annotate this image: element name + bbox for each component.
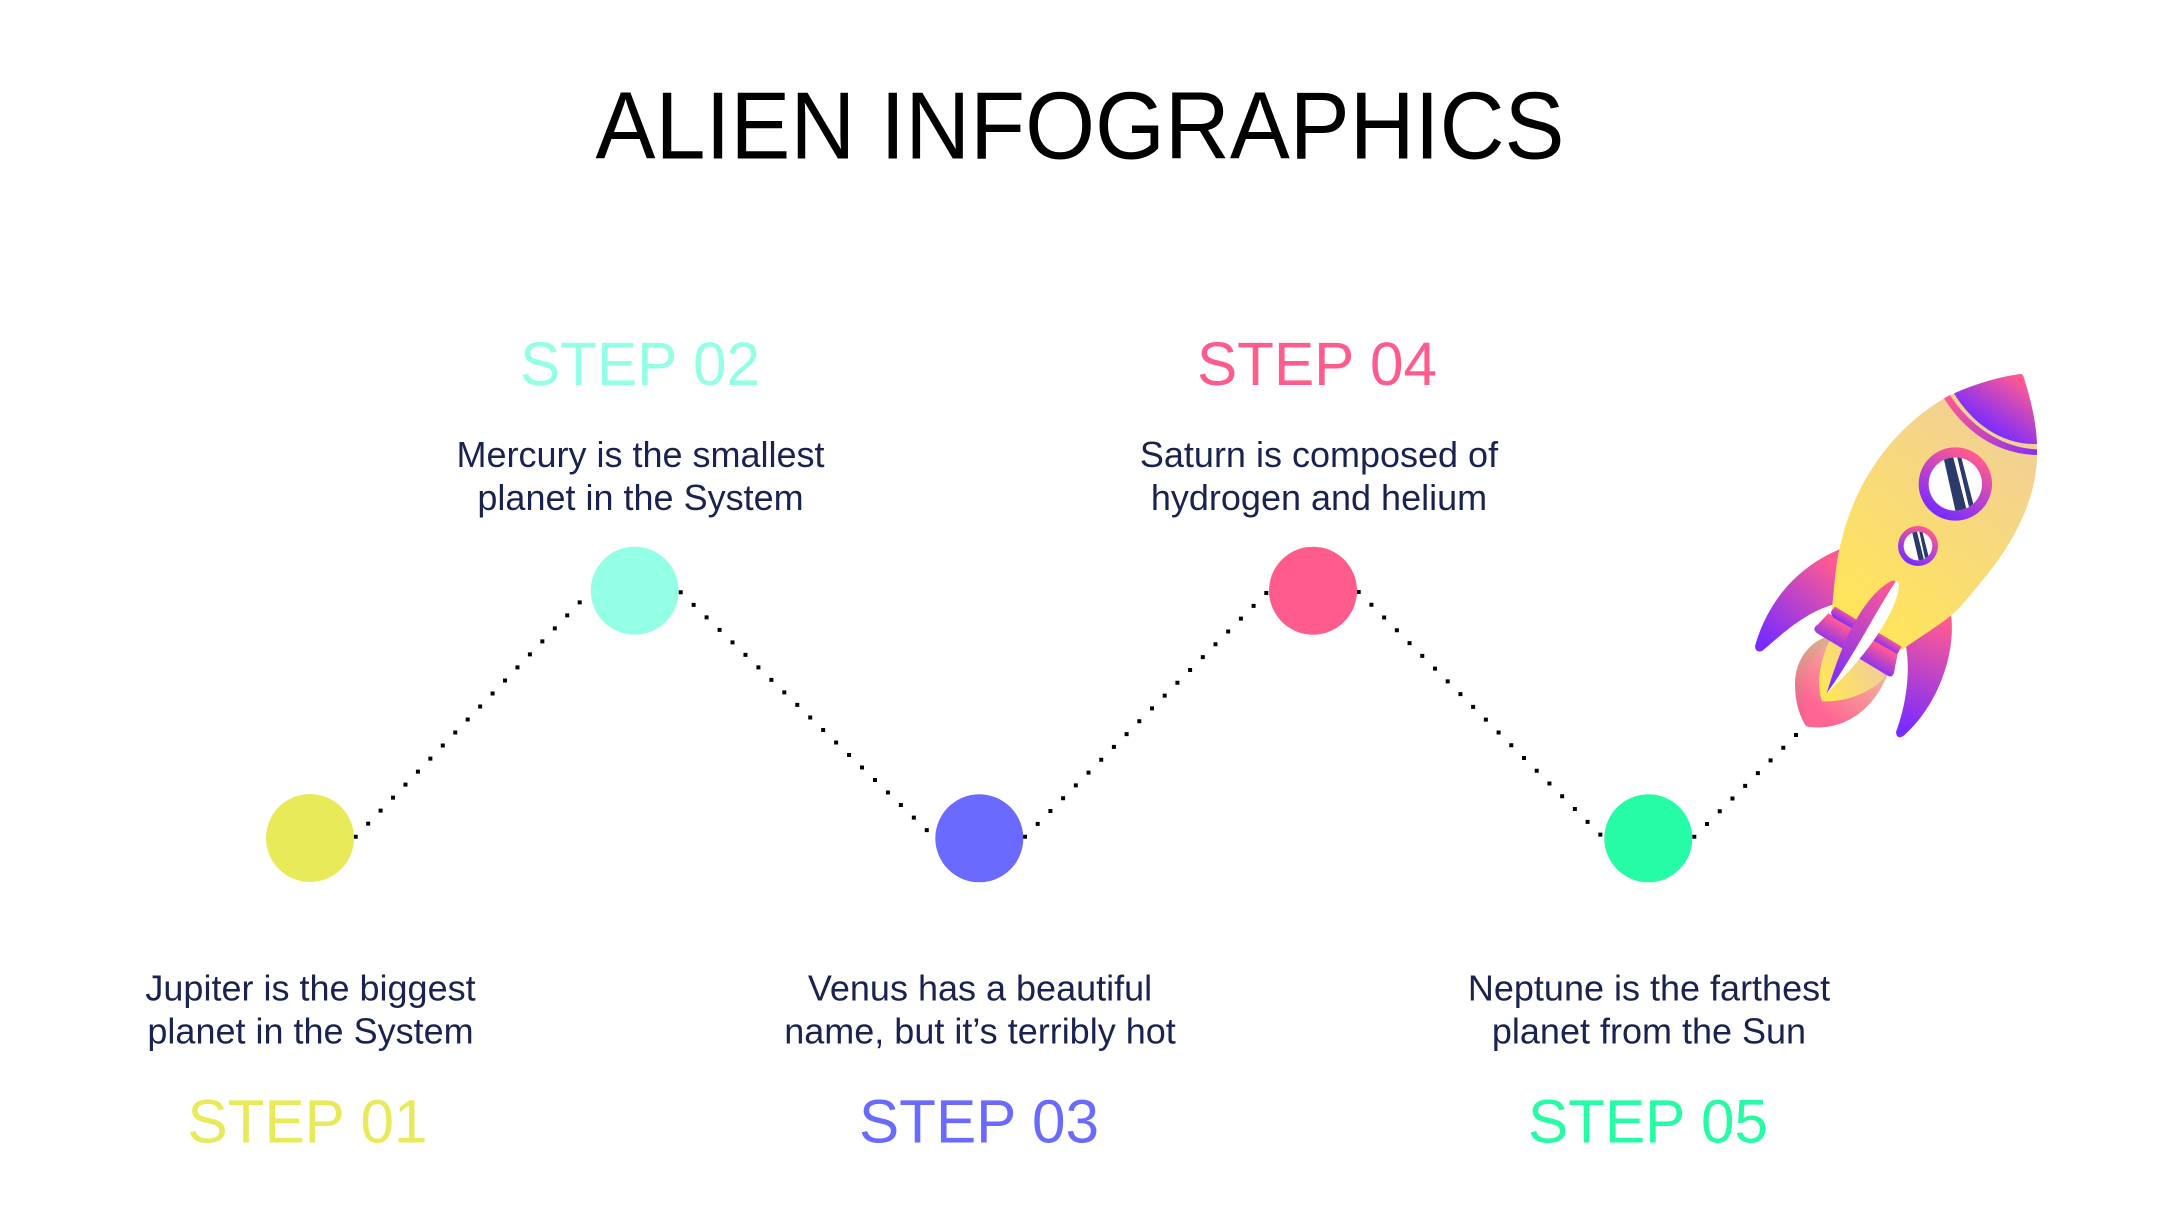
rocket nozzle [1814, 613, 1898, 677]
step 04 heading: STEP 04 [1197, 330, 1437, 399]
step 04 marker circle [1269, 547, 1357, 635]
rocket nose band [1944, 395, 2037, 455]
step 02 heading: STEP 02 [520, 330, 760, 399]
step 04 [1140, 330, 1499, 635]
step 03 description: name, but it’s terribly hot [784, 1010, 1176, 1051]
rocket left fin [1755, 547, 1847, 652]
step 01 marker circle [266, 794, 354, 882]
rocket small window [1898, 526, 1938, 566]
rocket right fin [1896, 603, 1952, 737]
rocket flame [1795, 635, 1887, 727]
step 03 description: Venus has a beautiful [808, 968, 1152, 1008]
step 05 heading: STEP 05 [1528, 1088, 1768, 1157]
title: ALIEN INFOGRAPHICS [596, 73, 1564, 179]
dotted connector: step 04 to step 05 [1359, 592, 1600, 835]
step 03 [784, 794, 1176, 1157]
step 03 heading: STEP 03 [859, 1088, 1099, 1157]
step 05 [1468, 794, 1830, 1157]
step 01 [145, 794, 476, 1157]
step 05 description: Neptune is the farthest [1468, 968, 1830, 1008]
rocket body [1832, 374, 2037, 650]
rocket large window [1919, 447, 1992, 521]
rocket centre fin [1827, 581, 1899, 693]
step 02 marker circle [591, 547, 679, 635]
dotted connector: step 02 to step 03 [681, 592, 927, 830]
step 01 heading: STEP 01 [188, 1088, 428, 1157]
rocket nose cone [1954, 374, 2037, 444]
step 05 description: planet from the Sun [1492, 1010, 1806, 1051]
step 02 description: planet in the System [477, 477, 804, 518]
step 01 description: Jupiter is the biggest [145, 968, 476, 1008]
step 04 description: hydrogen and helium [1151, 477, 1487, 518]
step 04 description: Saturn is composed of [1140, 434, 1499, 475]
rocket upper collar [1831, 607, 1902, 654]
dotted connector: step 01 to step 02 [356, 602, 580, 837]
step 02 description: Mercury is the smallest [456, 434, 825, 475]
step 02 [456, 330, 825, 635]
step 03 marker circle [935, 794, 1023, 882]
step 01 description: planet in the System [147, 1010, 474, 1051]
step 05 marker circle [1604, 794, 1692, 882]
dotted connector: step 05 to rocket [1694, 735, 1796, 837]
icon: rocket [1755, 374, 2037, 737]
dotted connector: step 03 to step 04 [1025, 593, 1266, 837]
